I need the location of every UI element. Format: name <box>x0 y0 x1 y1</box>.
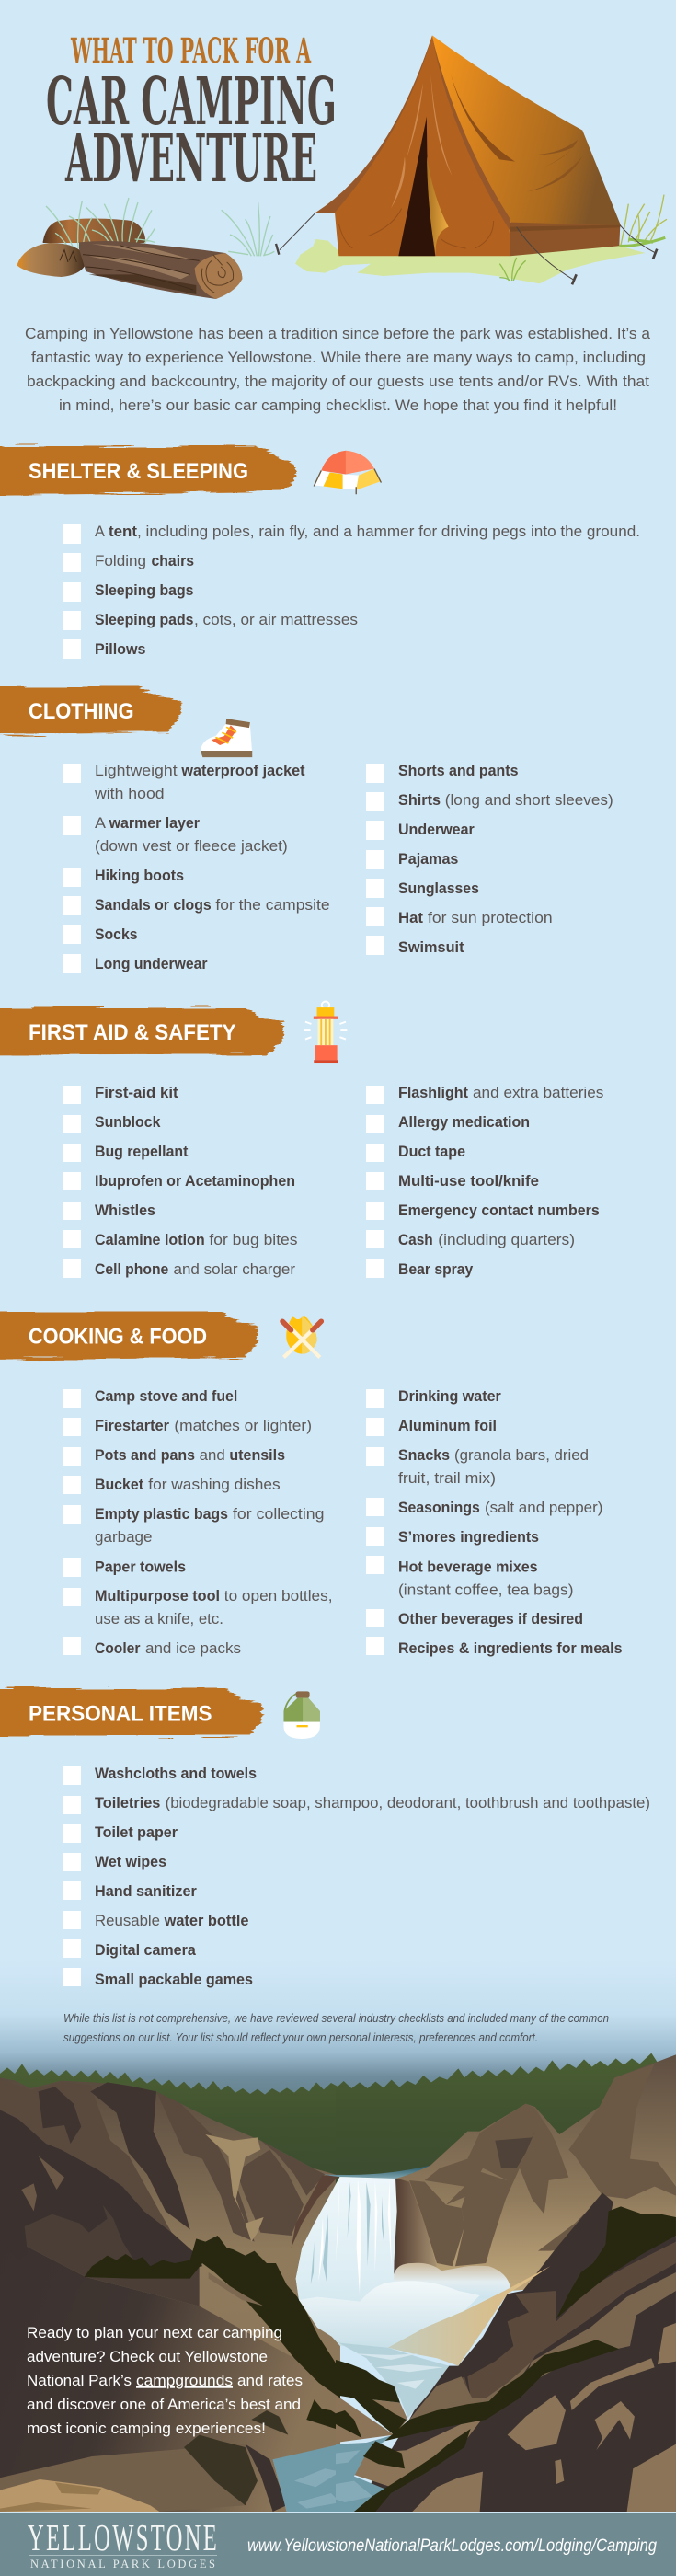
rock detail, west <box>0 2079 325 2242</box>
checklist: shelter items: chairs <box>151 553 194 569</box>
checklist: personal items: Washcloths and towels <box>95 1765 257 1782</box>
checklist: clothing left column: warmer layer <box>109 815 201 832</box>
heading banner: clothing: CLOTHING <box>29 699 134 724</box>
checklist: first aid right column: and extra batteries <box>473 1085 603 1101</box>
river, lower <box>336 2435 394 2512</box>
checklist: cooking left column: Camp stove and fuel <box>95 1388 237 1405</box>
checklist: cooking right column: (salt and pepper) <box>485 1500 602 1516</box>
checklist: cooking left column: Firestarter <box>95 1418 170 1434</box>
checklist: cooking right column: (granola bars, dried <box>454 1447 589 1464</box>
rock ledge bottom <box>0 2444 256 2512</box>
intro text <box>25 325 651 414</box>
waterfall <box>292 2165 437 2346</box>
checklist: personal items: Wet wipes <box>95 1854 166 1870</box>
checklist: cooking left column: garbage <box>95 1529 153 1546</box>
checklist: shelter items: tent <box>109 523 138 540</box>
checklist: cooking right column: Recipes & ingredients for meals <box>398 1640 622 1657</box>
pine trees, east <box>336 2206 676 2512</box>
title: CAR CAMPING <box>46 63 337 140</box>
checklist: first aid right column: Cash <box>398 1232 433 1248</box>
checklist: first aid left column: Calamine lotion <box>95 1232 205 1248</box>
checklist: first aid left column <box>63 1085 298 1278</box>
log <box>79 241 242 299</box>
checklist: cooking left column: Pots and pans <box>95 1447 195 1464</box>
river below falls <box>338 2343 449 2418</box>
checklist: clothing left column: A <box>95 815 106 832</box>
checklist: clothing right column: Hat <box>398 910 424 926</box>
checklist: clothing right column: Swimsuit <box>398 939 464 956</box>
heading banner: shelter and sleeping <box>0 446 296 495</box>
checklist: cooking left column: Cooler <box>95 1640 141 1657</box>
intro text: backpacking and backcountry, the majority of our guests use tents and/or RVs. With that <box>27 373 649 390</box>
checklist: cooking left column: use as a knife, etc. <box>95 1611 223 1627</box>
title <box>46 30 337 197</box>
checklist: clothing left column <box>63 763 330 973</box>
checklist: cooking left column: utensils <box>229 1447 285 1464</box>
rock behind falls <box>394 2178 437 2275</box>
checklist: first aid left column: and solar charger <box>173 1261 296 1278</box>
checklist: clothing left column: Sandals or clogs <box>95 897 212 914</box>
checklist: cooking left column: to open bottles, <box>224 1588 333 1604</box>
checklist: clothing left column: with hood <box>94 786 165 802</box>
checklist: clothing right column: for sun protection <box>428 910 553 926</box>
checklist: first aid left column: First-aid kit <box>95 1085 178 1101</box>
checklist: shelter items: Pillows <box>95 641 145 658</box>
checklist: cooking left column: Paper towels <box>95 1558 186 1575</box>
checklist: clothing right column: Shirts <box>398 792 441 809</box>
checklist: first aid left column: Sunblock <box>95 1114 161 1131</box>
icon: lantern <box>304 1001 347 1063</box>
logo: Yellowstone National Park Lodges: NATIONAL PARK LODGES <box>30 2558 215 2570</box>
icon: hiking boot <box>201 719 252 757</box>
call to action text: adventure? Check out Yellowstone <box>27 2348 268 2365</box>
checklist: cooking right column: (instant coffee, tea bags) <box>398 1582 574 1599</box>
checklist: personal items: (biodegradable soap, shampoo, deodorant, toothbrush and toothpaste) <box>166 1795 650 1811</box>
checklist: first aid right column: Duct tape <box>398 1144 465 1160</box>
checklist: first aid left column: Whistles <box>95 1202 155 1219</box>
forest and tree line, east <box>336 2053 676 2205</box>
icon: canteen <box>283 1691 320 1739</box>
panel: shelter and sleeping <box>0 446 640 659</box>
call to action text: and rates <box>237 2372 303 2389</box>
checklist: cooking left column: for collecting <box>233 1506 324 1523</box>
checklist: personal items: Reusable <box>95 1913 160 1929</box>
hero illustration: rocks, log and grass <box>17 198 274 299</box>
checklist: shelter items: Sleeping bags <box>95 582 193 599</box>
checklist: cooking right column <box>366 1388 622 1657</box>
checklist: clothing right column: Pajamas <box>398 851 458 868</box>
checklist: shelter items: Sleeping pads <box>95 612 193 628</box>
intro text: Camping in Yellowstone has been a tradition since before the park was established. It’s a <box>25 325 651 342</box>
checklist: personal items: Small packable games <box>95 1972 253 1988</box>
grass tufts by tent <box>499 195 667 281</box>
ground patch <box>295 239 646 283</box>
heading banner: first aid and safety <box>0 1007 283 1055</box>
checklist: cooking right column: S’mores ingredients <box>398 1529 539 1546</box>
checklist: clothing right column: (long and short sleeves) <box>445 792 613 809</box>
checklist: clothing right column: Underwear <box>398 822 475 838</box>
canyon wall, east <box>395 2054 676 2291</box>
checklist: shelter items <box>63 523 640 659</box>
sand slope <box>388 2266 550 2366</box>
heading banner: personal items <box>0 1688 262 1736</box>
call to action text: most iconic camping experiences! <box>27 2420 266 2437</box>
checklist: shelter items: Folding <box>95 553 146 569</box>
heading banner: first aid and safety: FIRST AID & SAFETY <box>29 1020 235 1045</box>
heading banner: cooking and food: COOKING & FOOD <box>29 1325 207 1349</box>
title: ADVENTURE <box>64 120 317 197</box>
checklist: clothing right column: Sunglasses <box>398 880 479 897</box>
dark lower rock, east <box>354 2192 676 2512</box>
checklist: personal items <box>63 1765 650 1988</box>
checklist: cooking left column: and <box>200 1447 225 1464</box>
checklist: first aid left column: Bug repellant <box>95 1144 189 1160</box>
front rock <box>17 243 87 277</box>
checklist: first aid right column <box>366 1085 603 1278</box>
intro text: fantastic way to experience Yellowstone. While there are many ways to camp, including <box>31 349 646 366</box>
heading banner: personal items: PERSONAL ITEMS <box>29 1702 212 1726</box>
checklist: personal items: Hand sanitizer <box>95 1883 197 1900</box>
checklist: cooking right column: fruit, trail mix) <box>398 1470 496 1487</box>
checklist: cooking right column: Seasonings <box>398 1500 480 1516</box>
checklist: shelter items: A <box>95 523 105 540</box>
heading banner: cooking and food <box>0 1312 258 1360</box>
panel: personal items <box>0 1688 650 1988</box>
illustration: Yellowstone canyon, east side and waterfall <box>292 2053 676 2512</box>
checklist: personal items: Digital camera <box>95 1942 197 1959</box>
disclaimer note: suggestions on our list. Your list should reflect your own personal interests, preferences and comfort. <box>63 2031 538 2044</box>
call to action text <box>27 2324 303 2437</box>
call to action text: campgrounds <box>136 2372 233 2389</box>
guy ropes and pegs <box>276 213 657 284</box>
checklist: clothing right column <box>366 763 613 956</box>
heading banner: shelter and sleeping: SHELTER & SLEEPING <box>29 459 248 484</box>
footer bar <box>0 2513 676 2576</box>
river, west <box>273 2444 340 2512</box>
logo: Yellowstone National Park Lodges: YELLOWSTONE <box>28 2518 217 2559</box>
grass tuft <box>222 202 274 256</box>
checklist: first aid left column: Cell phone <box>95 1261 168 1278</box>
back rock <box>43 218 145 243</box>
icon: dome tent <box>314 451 381 494</box>
checklist: personal items: water bottle <box>164 1913 248 1929</box>
checklist: cooking left column: Bucket <box>95 1477 143 1493</box>
checklist: first aid right column: Emergency contact numbers <box>398 1202 600 1219</box>
panel: clothing <box>0 686 613 973</box>
checklist: cooking left column: for washing dishes <box>148 1477 281 1493</box>
illustration: Yellowstone canyon, west side <box>0 2064 340 2512</box>
intro text: in mind, here’s our basic car camping checklist. We hope that you find it helpful! <box>59 397 617 414</box>
checklist: shelter items: , cots, or air mattresses <box>194 612 358 628</box>
checklist: first aid left column: Ibuprofen or Acetaminophen <box>95 1173 295 1190</box>
checklist: first aid right column: (including quarters) <box>438 1232 575 1248</box>
checklist: cooking left column: and ice packs <box>145 1640 241 1657</box>
checklist: cooking left column: Multipurpose tool <box>95 1588 220 1604</box>
checklist: cooking right column: Drinking water <box>398 1388 501 1405</box>
forest and tree line, west <box>0 2064 340 2205</box>
checklist: first aid left column: for bug bites <box>209 1232 298 1248</box>
checklist: cooking left column <box>63 1388 333 1657</box>
checklist: first aid right column: Flashlight <box>398 1085 468 1101</box>
checklist: clothing left column: for the campsite <box>215 897 330 914</box>
mist clouds <box>299 2263 510 2348</box>
checklist: clothing left column: waterproof jacket <box>180 763 305 779</box>
lower rock, west <box>0 2233 340 2512</box>
call to action text: National Park’s <box>27 2372 132 2389</box>
tent <box>315 35 621 256</box>
title: WHAT TO PACK FOR A <box>70 30 312 71</box>
checklist: cooking left column: (matches or lighter) <box>174 1418 312 1434</box>
canyon wall, west <box>0 2077 340 2512</box>
checklist: first aid right column: Bear spray <box>398 1261 474 1278</box>
checklist: clothing left column: Socks <box>95 926 138 943</box>
panel: first aid and safety <box>0 1001 603 1278</box>
pine trees, west <box>85 2236 340 2398</box>
checklist: cooking right column: Hot beverage mixes <box>398 1558 538 1575</box>
checklist: clothing left column: Hiking boots <box>95 868 184 884</box>
call to action text: and discover one of America’s best and <box>27 2396 301 2413</box>
call to action text: Ready to plan your next car camping <box>27 2324 282 2341</box>
disclaimer note <box>63 2012 609 2044</box>
checklist: clothing left column: (down vest or fleece jacket) <box>95 838 288 855</box>
icon: crossed matches and flame <box>282 1315 321 1357</box>
grass behind log <box>46 198 155 248</box>
checklist: personal items: Toiletries <box>95 1795 160 1811</box>
checklist: clothing left column: Long underwear <box>95 956 208 972</box>
checklist: cooking right column: Snacks <box>398 1447 450 1464</box>
panel: cooking and food <box>0 1312 622 1657</box>
rock detail, east <box>409 2064 676 2266</box>
checklist: clothing right column: Shorts and pants <box>398 763 519 779</box>
hero illustration: tent <box>276 35 667 284</box>
checklist: clothing left column: Lightweight <box>95 763 178 779</box>
checklist: shelter items: , including poles, rain fly, and a hammer for driving pegs into the ground. <box>137 523 640 540</box>
checklist: cooking right column: Aluminum foil <box>398 1418 497 1434</box>
checklist: cooking right column: Other beverages if desired <box>398 1611 583 1627</box>
checklist: cooking left column: Empty plastic bags <box>95 1506 228 1523</box>
heading banner: clothing <box>0 686 181 735</box>
checklist: personal items: Toilet paper <box>95 1824 178 1841</box>
checklist: first aid right column: Allergy medication <box>398 1114 530 1131</box>
checklist: first aid right column: Multi-use tool/knife <box>398 1173 539 1190</box>
disclaimer note: While this list is not comprehensive, we have reviewed several industry checklists and included many of the common <box>63 2012 609 2025</box>
